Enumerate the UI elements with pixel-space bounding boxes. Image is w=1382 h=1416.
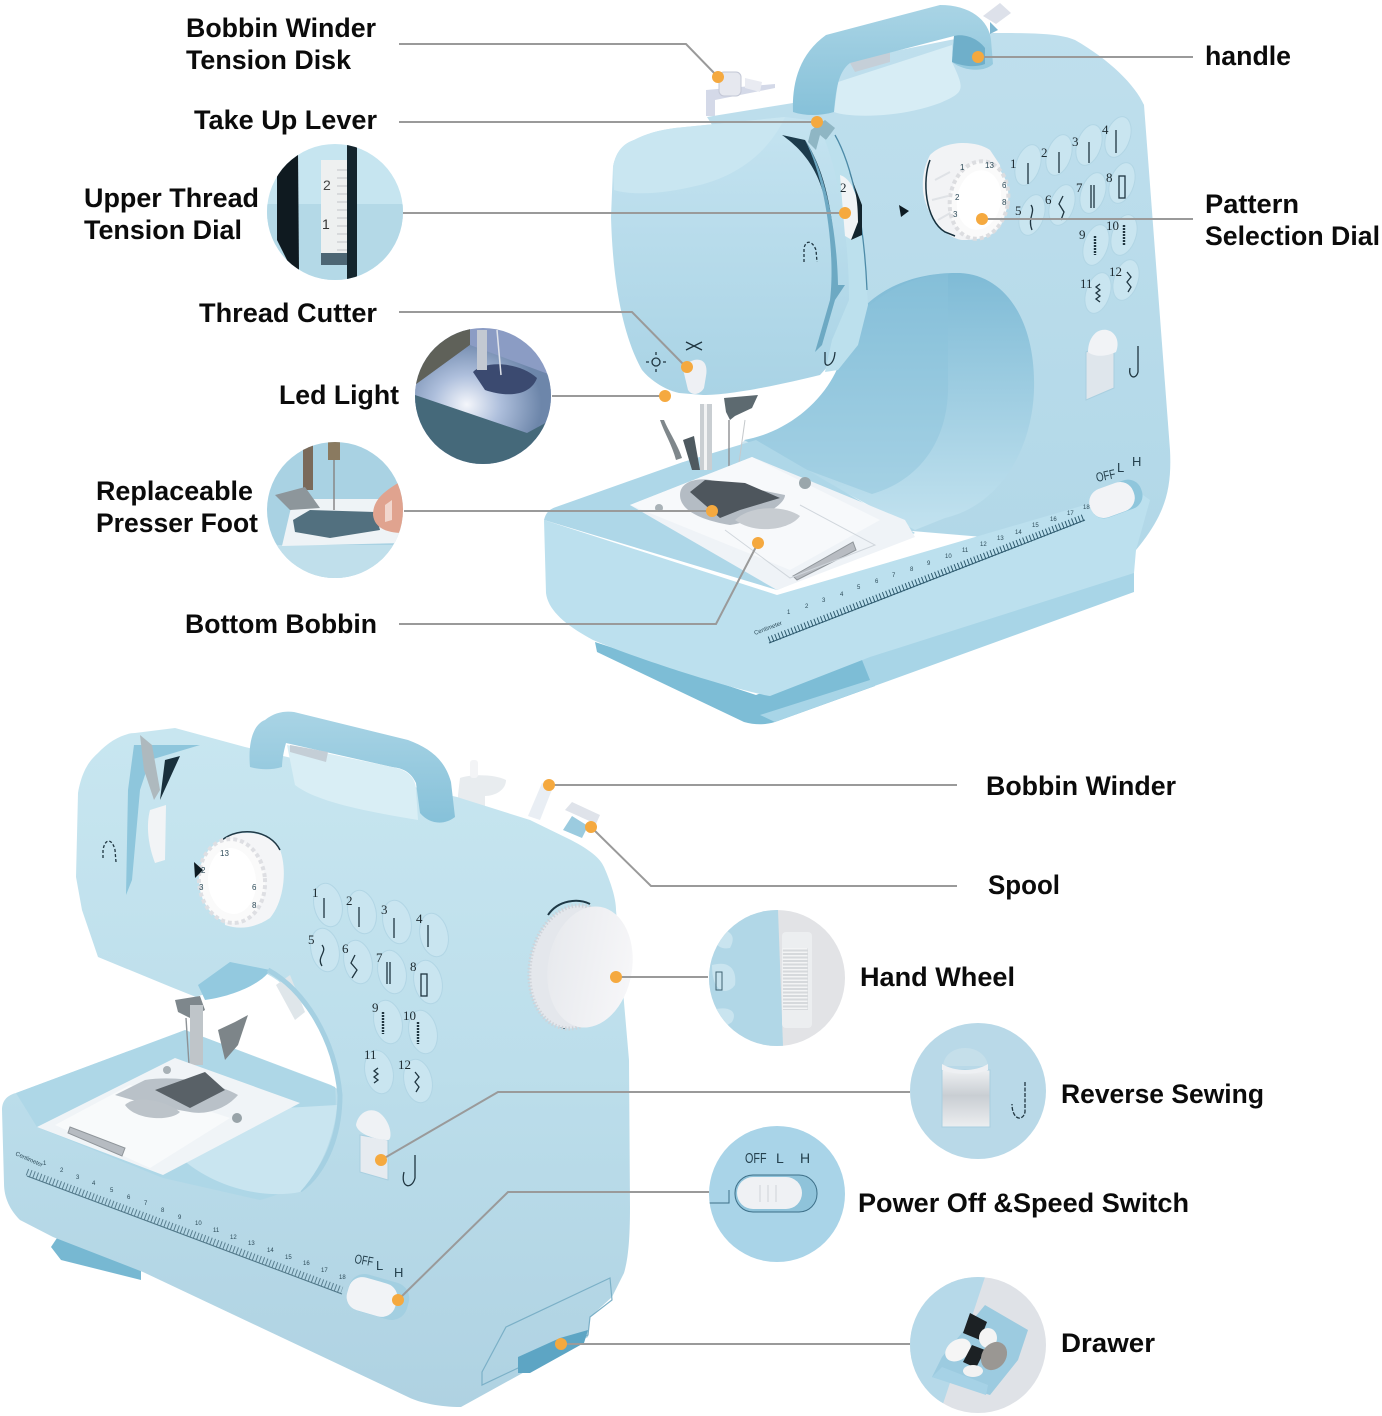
reverse lever side (356, 1110, 415, 1186)
ruler side: 3 (76, 1175, 80, 1181)
ruler side: 16 (303, 1261, 310, 1267)
head (611, 117, 864, 395)
ruler side: 8 (161, 1208, 165, 1214)
ruler front: Centimeter (754, 621, 783, 637)
pattern selection dial: 3 (953, 210, 958, 219)
ruler side: 13 (248, 1241, 255, 1247)
ruler front: 10 (945, 554, 952, 560)
thread slot side (126, 735, 200, 895)
ruler side: 17 (321, 1268, 328, 1274)
head lower lobe (198, 962, 270, 1000)
pattern selection dial: 2 (955, 193, 960, 202)
pattern selection dial: 1 (960, 163, 965, 172)
ruler front: 8 (910, 567, 914, 573)
leader lines (381, 44, 1193, 1344)
ruler side: 11 (213, 1228, 220, 1234)
pattern dial side (194, 832, 284, 928)
ruler front: 14 (1015, 530, 1022, 536)
ruler side: 6 (127, 1195, 131, 1201)
sewing machine: side view (2, 712, 642, 1407)
pattern buttons side: 7 (376, 950, 383, 965)
ruler side: 18 (339, 1275, 346, 1281)
pattern buttons front: 5 (1015, 203, 1022, 218)
power switch side (343, 1253, 413, 1324)
inset: power and speed switch (709, 1126, 845, 1262)
foot of front machine (595, 565, 1134, 724)
ruler side: 4 (92, 1181, 96, 1187)
ruler side: 10 (195, 1221, 202, 1227)
upper tension dial: 2 (840, 180, 846, 195)
pattern buttons side: 8 (410, 959, 416, 974)
arch rim (268, 970, 340, 1190)
ruler front: 1 (787, 610, 791, 616)
machine body side (2, 728, 630, 1407)
handle (793, 5, 993, 115)
spool pin side (563, 802, 600, 838)
pattern buttons front: 3 (1072, 134, 1078, 149)
ruler front: 12 (980, 542, 987, 548)
label: bobbin winder tension disk: Tension Disk (186, 45, 352, 75)
power switch front: L (1117, 460, 1124, 475)
power switch side: H (394, 1265, 403, 1280)
white arch gap side (98, 957, 339, 1090)
upper tension dial (840, 172, 862, 240)
pattern buttons front: 7 (1076, 180, 1083, 195)
ruler front: 7 (892, 573, 896, 579)
pattern buttons side: 9 (372, 1000, 378, 1015)
face plate (825, 135, 868, 372)
label: handle: handle (1205, 41, 1291, 71)
thread path icon (804, 242, 817, 262)
pattern buttons side: 6 (342, 941, 349, 956)
pattern selection dial: 8 (1002, 198, 1007, 207)
label: replaceable presser foot: Presser Foot (96, 508, 258, 538)
presser foot side (175, 996, 248, 1080)
orange marker dots (375, 51, 988, 1350)
inset: power and speed switch: H (800, 1150, 810, 1166)
pattern buttons front: 11 (1080, 276, 1093, 291)
inset: upper thread tension dial: 2 (323, 177, 331, 193)
inset: upper thread tension dial: 1 (322, 216, 330, 232)
reverse lever front (1086, 330, 1138, 400)
pattern dial side: 6 (252, 883, 257, 892)
pattern dial side: 2 (201, 866, 206, 875)
bobbin winder pin (528, 783, 553, 820)
ruler side: Centimeter (14, 1151, 43, 1169)
ruler front: 4 (840, 592, 844, 598)
label: upper thread tension dial: Upper Thread (84, 183, 259, 213)
pattern dial side: 13 (220, 849, 229, 858)
pattern buttons side: 2 (346, 893, 352, 908)
pattern buttons front: 2 (1041, 145, 1048, 160)
tension dial side (148, 805, 166, 863)
ruler side: 7 (144, 1201, 148, 1207)
pattern buttons side: 4 (416, 911, 423, 926)
pattern buttons side: 1 (312, 885, 318, 900)
inset: hand wheel (709, 910, 845, 1046)
label: led light: Led Light (279, 380, 399, 410)
label: reverse sewing: Reverse Sewing (1061, 1079, 1264, 1109)
pattern buttons front: 9 (1079, 227, 1086, 242)
ruler front: 3 (822, 598, 826, 604)
foot side (51, 1238, 141, 1280)
pattern buttons front (1010, 113, 1144, 317)
pattern buttons side: 3 (381, 902, 388, 917)
light housing pin (276, 975, 305, 1020)
label: hand wheel: Hand Wheel (860, 962, 1015, 992)
label: take up lever: Take Up Lever (194, 105, 377, 135)
hand wheel (520, 898, 642, 1036)
pattern buttons side: 11 (364, 1047, 377, 1062)
ruler side: 12 (230, 1235, 237, 1241)
sewing machine: front view (544, 3, 1170, 724)
base (544, 490, 1150, 696)
label: bottom bobbin: Bottom Bobbin (185, 609, 377, 639)
main column (707, 33, 1170, 550)
ruler side (14, 1151, 346, 1294)
bobbin winder tension disk (706, 72, 775, 116)
pattern buttons front: 6 (1045, 192, 1052, 207)
label: drawer: Drawer (1061, 1328, 1156, 1358)
white arch gap beside needle (683, 345, 845, 462)
ruler front: 17 (1067, 511, 1074, 517)
pattern buttons front: 10 (1106, 218, 1119, 233)
inset: power and speed switch: OFF (745, 1149, 767, 1166)
ruler front: 11 (962, 548, 969, 554)
spool pin (983, 3, 1011, 24)
handle side (250, 712, 455, 823)
base top (16, 1030, 336, 1200)
recess side (287, 745, 418, 820)
needle and presser foot (660, 395, 758, 500)
ruler front: 5 (857, 585, 861, 591)
label: bobbin winder tension disk: Bobbin Winder (186, 13, 376, 43)
label: spool: Spool (988, 870, 1060, 900)
pattern dial triangle (899, 205, 909, 217)
take up lever slot (782, 135, 836, 285)
inset: drawer (910, 1277, 1046, 1413)
ruler side: 9 (178, 1215, 182, 1221)
label: thread cutter: Thread Cutter (199, 298, 377, 328)
pattern buttons side: 5 (308, 932, 314, 947)
power switch front: OFF (1095, 468, 1117, 485)
thread spool pin (458, 760, 506, 815)
ruler side: 1 (43, 1161, 47, 1167)
pattern buttons side: 10 (403, 1008, 416, 1023)
power switch side: OFF (353, 1253, 374, 1270)
label: bobbin winder: Bobbin Winder (986, 771, 1176, 801)
power switch side: L (376, 1258, 383, 1273)
pattern buttons front: 4 (1102, 122, 1109, 137)
pattern selection dial: 13 (985, 161, 994, 170)
pattern buttons side: 12 (398, 1057, 411, 1072)
power switch front: H (1132, 454, 1141, 469)
pattern buttons front: 1 (1010, 156, 1016, 171)
inset: reverse sewing (910, 1023, 1046, 1159)
label: pattern selection dial: Selection Dial (1205, 221, 1380, 251)
label: pattern selection dial: Pattern (1205, 189, 1299, 219)
pattern selection dial (923, 143, 1014, 243)
label: replaceable presser foot: Replaceable (96, 476, 253, 506)
inset: led light (415, 328, 551, 464)
ruler front (754, 505, 1090, 643)
pattern buttons side (307, 881, 452, 1105)
pattern selection dial: 6 (1002, 181, 1007, 190)
ruler side: 15 (285, 1255, 292, 1261)
label: power off and speed switch: Power Off &Speed Switch (858, 1188, 1189, 1218)
inset: power and speed switch: L (776, 1150, 784, 1166)
inset: upper thread tension dial (267, 144, 403, 280)
power switch front (1085, 454, 1147, 522)
ruler front: 18 (1083, 505, 1090, 511)
pattern dial side: 8 (252, 901, 257, 910)
ruler side: 5 (110, 1188, 114, 1194)
recess under handle (834, 45, 961, 116)
inset: replaceable presser foot (267, 442, 405, 578)
ruler side: 2 (60, 1168, 64, 1174)
label: upper thread tension dial: Tension Dial (84, 215, 242, 245)
thread path icon side (103, 841, 116, 862)
ruler front: 13 (997, 536, 1004, 542)
thread cutter and light icons (646, 342, 835, 394)
ruler front: 15 (1032, 523, 1039, 529)
ruler side: 14 (267, 1248, 274, 1254)
pattern dial side: 3 (199, 883, 204, 892)
ruler front: 6 (875, 579, 879, 585)
pattern buttons front: 12 (1109, 264, 1122, 279)
arch opening (744, 273, 1034, 530)
needle plate side (37, 1058, 300, 1175)
needle plate (630, 457, 915, 590)
ruler front: 9 (927, 561, 931, 567)
pattern buttons front: 8 (1106, 170, 1112, 185)
ruler front: 2 (805, 604, 809, 610)
ruler front: 16 (1050, 517, 1057, 523)
drawer side (482, 1278, 612, 1385)
